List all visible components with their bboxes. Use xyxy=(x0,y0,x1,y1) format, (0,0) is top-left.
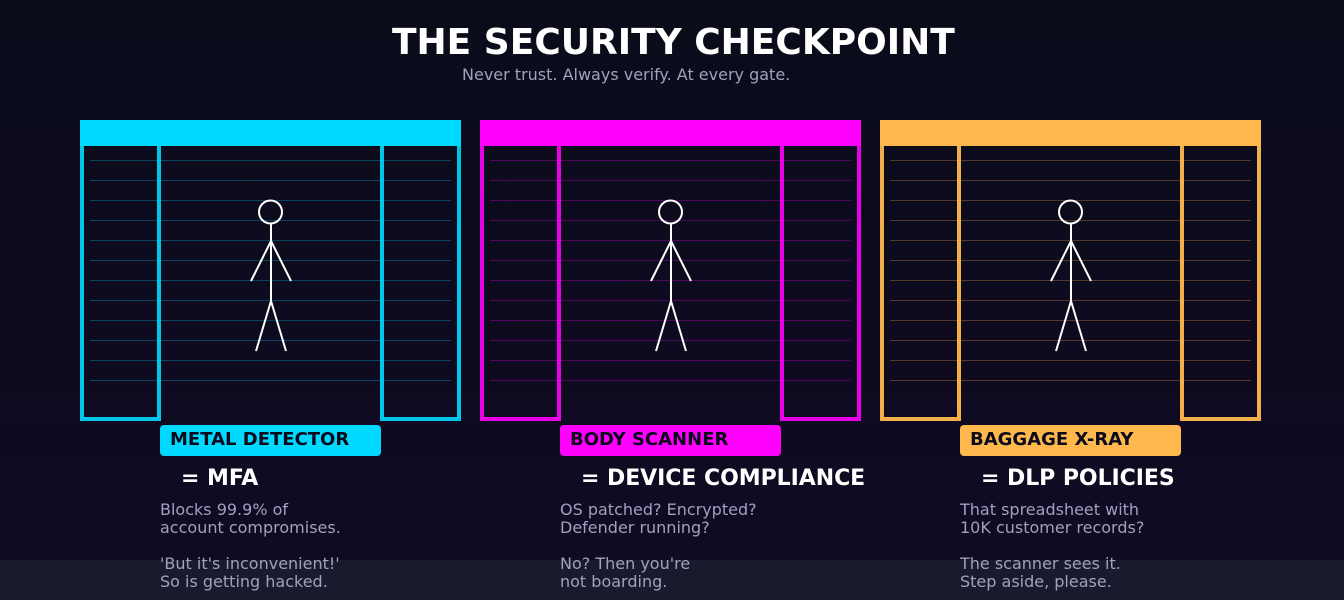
heading: device compliance: = DEVICE COMPLIANCE xyxy=(581,466,865,491)
scan lines: baggage x-ray xyxy=(890,160,1251,380)
text block: device compliance: OS patched? Encrypted? xyxy=(560,500,757,519)
badge: body scanner xyxy=(560,425,781,456)
scan lines: body scanner xyxy=(490,160,851,380)
heading: MFA: = MFA xyxy=(181,466,258,491)
panel: body scanner xyxy=(480,120,865,591)
text block: DLP policies: The scanner sees it. xyxy=(959,554,1121,573)
badge: metal detector: METAL DETECTOR xyxy=(170,429,349,450)
subtitle: Never trust. Always verify. At every gate. xyxy=(462,65,790,84)
panel: metal detector xyxy=(80,120,461,591)
title: THE SECURITY CHECKPOINT xyxy=(392,22,955,63)
text block: DLP policies: Step aside, please. xyxy=(960,572,1112,591)
text block: MFA: So is getting hacked. xyxy=(160,572,328,591)
text block: device compliance: Defender running? xyxy=(560,518,710,537)
heading: DLP policies: = DLP POLICIES xyxy=(981,466,1175,491)
text block: MFA: Blocks 99.9% of xyxy=(160,500,288,519)
icon: person xyxy=(1051,200,1091,351)
text block: device compliance: not boarding. xyxy=(560,572,667,591)
text block: device compliance: No? Then you're xyxy=(560,554,690,573)
text block: DLP policies: That spreadsheet with xyxy=(959,500,1139,519)
text block: MFA: 'But it's inconvenient!' xyxy=(160,554,340,573)
badge: baggage x-ray: BAGGAGE X-RAY xyxy=(970,429,1134,450)
gate frame: body scanner xyxy=(480,120,861,419)
badge: baggage x-ray xyxy=(960,425,1181,456)
gate frame: metal detector xyxy=(80,120,461,419)
icon: person xyxy=(651,200,691,351)
gate frame: baggage x-ray xyxy=(880,120,1261,419)
scan lines: metal detector xyxy=(90,160,451,380)
icon: person xyxy=(251,200,291,351)
text block: MFA: account compromises. xyxy=(160,518,341,537)
text block: DLP policies: 10K customer records? xyxy=(960,518,1144,537)
badge: metal detector xyxy=(160,425,381,456)
panel: baggage x-ray xyxy=(880,120,1261,591)
footer band xyxy=(0,560,1344,600)
badge: body scanner: BODY SCANNER xyxy=(570,429,728,450)
